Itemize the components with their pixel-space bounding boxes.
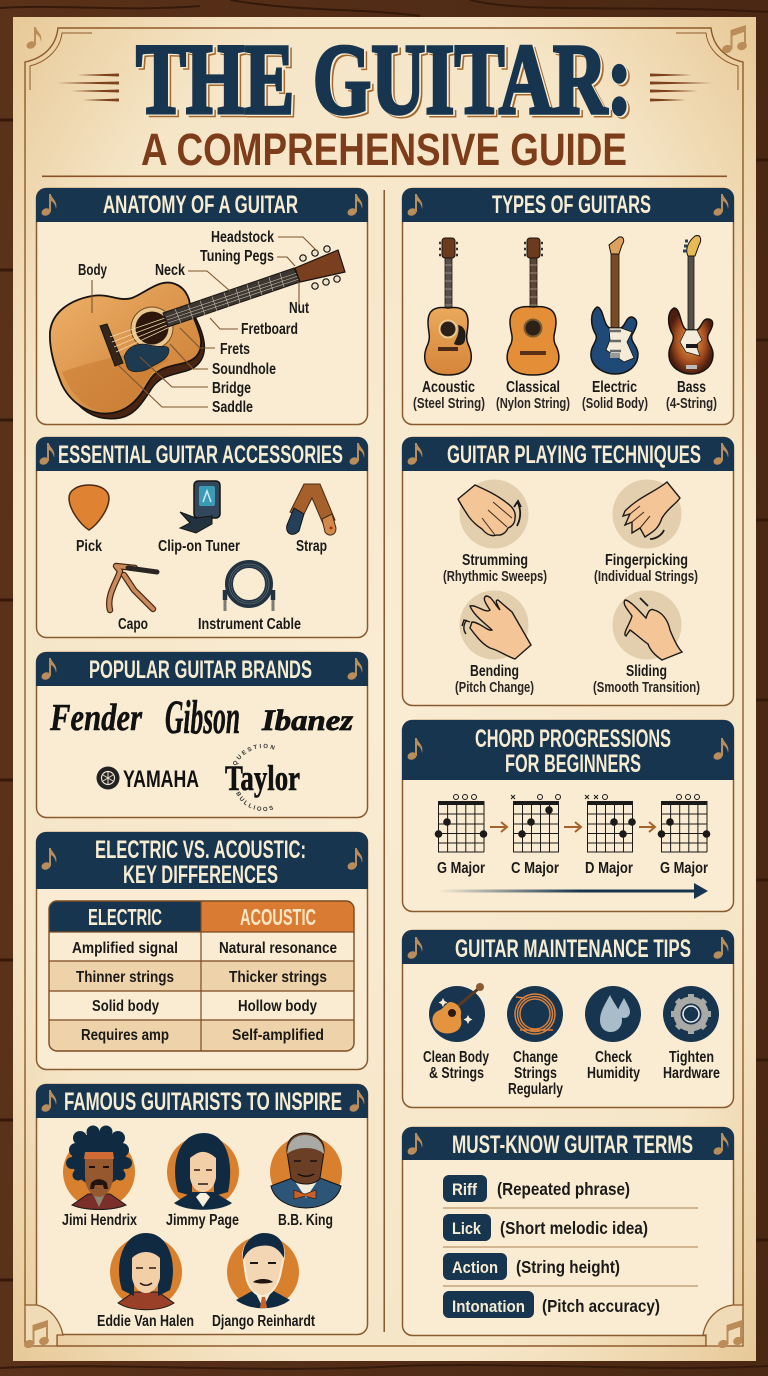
chord diagram: G major repeat [658, 794, 710, 852]
logo: Taylor: QUESTION [233, 744, 275, 766]
term: riff: (Repeated phrase) [497, 1179, 630, 1199]
heading: ESSENTIAL GUITAR ACCESSORIES [58, 441, 343, 469]
accessory labels: Pick [76, 538, 102, 555]
icon: clean guitar [429, 983, 485, 1042]
heading: ANATOMY OF A GUITAR [103, 191, 298, 219]
accessory labels: Instrument Cable [198, 616, 301, 633]
column divider [384, 190, 385, 1332]
comparison table: Thicker strings [229, 969, 327, 986]
guitarist names [62, 1212, 333, 1330]
logo: Ibanez: Ibanez [261, 704, 353, 737]
term: riff: Riff [452, 1180, 477, 1199]
technique labels: Strumming [462, 552, 528, 569]
chord diagram: G major [435, 794, 487, 852]
panel: chord progressions [402, 720, 734, 912]
heading: POPULAR GUITAR BRANDS [89, 656, 312, 684]
icon: acoustic guitar [425, 238, 471, 375]
part labels: Tuning Pegs [200, 248, 274, 265]
portrait: Django Reinhardt [227, 1233, 299, 1308]
comparison table: Requires amp [81, 1027, 169, 1044]
panel: guitar maintenance tips [402, 930, 734, 1108]
accessory labels: Clip-on Tuner [158, 538, 240, 555]
logo: Yamaha [96, 766, 199, 793]
part labels: Headstock [211, 229, 274, 246]
part labels: Nut [289, 300, 309, 317]
technique labels: Bending [470, 663, 519, 680]
icon: strap [287, 484, 336, 535]
term: lick: (Short melodic idea) [500, 1218, 648, 1238]
icon: sliding hand [612, 590, 682, 660]
guitarist names: B.B. King [278, 1212, 333, 1229]
portrait: Eddie Van Halen [110, 1233, 182, 1310]
comparison table: Thinner strings [76, 969, 174, 986]
comparison table: ELECTRIC [88, 904, 162, 930]
arrow [564, 822, 581, 832]
icon: bending hand [460, 590, 531, 660]
technique labels [443, 552, 700, 696]
comparison table: ACOUSTIC [240, 904, 316, 930]
panel: essential guitar accessories [36, 437, 368, 638]
maintenance labels: Check [595, 1049, 632, 1066]
leader lines [92, 237, 318, 407]
maintenance labels: & Strings [429, 1065, 484, 1082]
technique labels: Sliding [626, 663, 667, 680]
guitar type labels: Bass [677, 379, 706, 396]
chord names: C Major [511, 860, 559, 877]
portrait: B.B. King [270, 1133, 342, 1208]
term: riff [443, 1175, 630, 1202]
term: intonation: Intonation [452, 1297, 525, 1316]
logo: Taylor [225, 744, 300, 812]
icon: fingerpicking hand [612, 480, 682, 548]
subtitle: A COMPREHENSIVE GUIDE [141, 124, 627, 175]
part labels: Soundhole [212, 361, 276, 378]
title flourishes [57, 74, 712, 102]
accessory labels: Capo [118, 616, 148, 633]
logo: Taylor: Taylor [225, 758, 300, 798]
logo: Fender: Fender [49, 697, 143, 739]
term: lick [443, 1214, 648, 1241]
comparison table: Natural resonance [219, 940, 337, 957]
panel: electric vs. acoustic [36, 832, 368, 1070]
term: action: (String height) [516, 1257, 620, 1277]
technique labels: (Pitch Change) [455, 680, 534, 696]
term: action [443, 1253, 620, 1280]
guitarist names: Jimi Hendrix [62, 1212, 137, 1229]
icon: clip-on tuner [180, 481, 220, 533]
technique labels: (Smooth Transition) [593, 680, 700, 696]
accessory labels [76, 538, 327, 633]
chord names: G Major [660, 860, 708, 877]
maintenance labels: Strings [514, 1065, 557, 1082]
heading: TYPES OF GUITARS [492, 191, 651, 219]
panel: types of guitars [402, 188, 734, 424]
maintenance labels: Clean Body [423, 1049, 489, 1066]
icon: instrument cable [225, 564, 273, 611]
maintenance labels [423, 1049, 720, 1098]
heading: FAMOUS GUITARISTS TO INSPIRE [64, 1088, 342, 1116]
heading: CHORD PROGRESSIONS [475, 725, 671, 753]
chord names [437, 860, 708, 877]
guitar type labels: Classical [506, 379, 560, 396]
arrow [490, 822, 507, 832]
icon: capo [109, 566, 157, 610]
part labels: Fretboard [241, 321, 298, 338]
icon: pick [69, 485, 109, 530]
icon: strumming hand [458, 480, 528, 548]
term: intonation: (Pitch accuracy) [542, 1296, 660, 1316]
chord diagram: D major [585, 794, 636, 852]
comparison table: Self-amplified [232, 1027, 324, 1044]
panel: famous guitarists [36, 1084, 368, 1334]
chord names: G Major [437, 860, 485, 877]
comparison table: Solid body [92, 998, 159, 1015]
progression arrow [438, 883, 708, 899]
part labels [78, 229, 309, 416]
icon: humidity drops [585, 986, 641, 1042]
header rule [42, 176, 727, 177]
technique labels: (Individual Strings) [594, 569, 698, 585]
heading: FOR BEGINNERS [505, 750, 641, 778]
portrait: Jimi Hendrix [63, 1126, 135, 1210]
heading [475, 725, 671, 778]
part labels: Bridge [212, 380, 251, 397]
part labels: Frets [220, 341, 250, 358]
guitarist names: Django Reinhardt [212, 1313, 315, 1330]
guitar type labels: (4-String) [666, 396, 717, 412]
term: action: Action [452, 1258, 498, 1277]
maintenance labels: Change [513, 1049, 558, 1066]
panel: popular guitar brands [36, 652, 368, 818]
guitar type labels: (Steel String) [413, 396, 485, 412]
logo: Gibson: Gibson [165, 691, 240, 744]
icon: electric guitar [591, 237, 638, 374]
guitar type labels [413, 379, 717, 412]
corner ornament: bottom left [25, 1305, 63, 1346]
maintenance labels: Regularly [508, 1081, 563, 1098]
portrait: Jimmy Page [167, 1133, 239, 1210]
chord diagram: C major [511, 794, 560, 852]
guitar type labels: Electric [592, 379, 637, 396]
panel: anatomy of a guitar [36, 188, 368, 424]
comparison table [49, 901, 354, 1051]
icon: string coil [507, 986, 563, 1042]
part labels: Neck [155, 262, 185, 279]
logo: Yamaha: YAMAHA [123, 766, 199, 793]
panel: guitar playing techniques [402, 437, 734, 706]
icon: gear [663, 986, 719, 1042]
part labels: Saddle [212, 399, 253, 416]
guitar type labels: Acoustic [422, 379, 475, 396]
maintenance labels: Hardware [663, 1065, 720, 1082]
term: intonation [443, 1291, 660, 1318]
comparison table: Amplified signal [72, 940, 178, 957]
technique labels: Fingerpicking [605, 552, 688, 569]
logo: Taylor: BULLIOOS [236, 791, 274, 812]
arrow [639, 822, 655, 832]
illustration: labelled acoustic guitar [50, 246, 345, 419]
panel: must-know guitar terms [402, 1127, 734, 1336]
guitarist names: Jimmy Page [166, 1212, 239, 1229]
technique labels: (Rhythmic Sweeps) [443, 569, 547, 585]
heading: ELECTRIC VS. ACOUSTIC: [95, 836, 306, 864]
guitarist names: Eddie Van Halen [97, 1313, 194, 1330]
heading: KEY DIFFERENCES [123, 861, 278, 889]
corner ornament: bottom right [703, 1305, 743, 1346]
accessory labels: Strap [296, 538, 327, 555]
term: lick: Lick [452, 1219, 481, 1238]
icon: classical guitar [507, 238, 559, 375]
icon: bass guitar [669, 236, 713, 374]
heading [95, 836, 306, 889]
maintenance labels: Humidity [587, 1065, 640, 1082]
maintenance labels: Tighten [669, 1049, 714, 1066]
comparison table: Hollow body [238, 998, 317, 1015]
guitar type labels: (Nylon String) [496, 396, 570, 412]
chord names: D Major [585, 860, 633, 877]
part labels: Body [78, 262, 107, 279]
guitar type labels: (Solid Body) [582, 396, 648, 412]
